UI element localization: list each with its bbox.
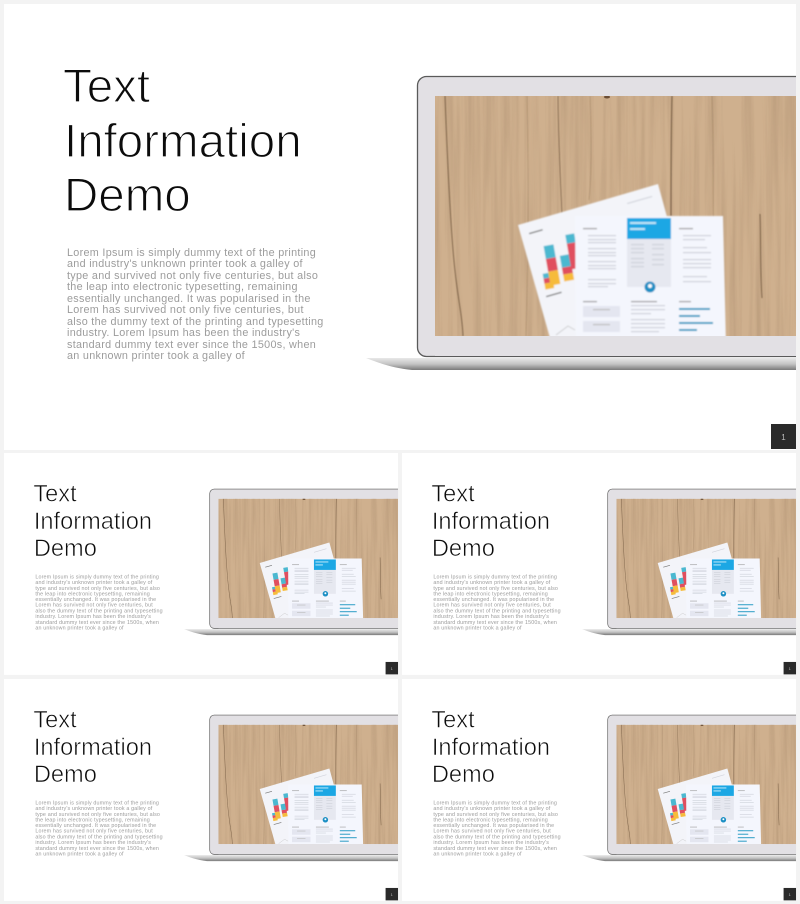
page number badge: 1 xyxy=(789,666,792,671)
body text xyxy=(35,574,163,632)
slide 2: small panel top left xyxy=(4,453,409,675)
title: Information xyxy=(64,115,302,168)
body text: Lorem has survived not only five centuries, but xyxy=(67,304,304,316)
body text: industry. Lorem Ipsum has been the industry's xyxy=(433,840,549,846)
body text: industry. Lorem Ipsum has been the industry's xyxy=(35,614,151,620)
title xyxy=(63,60,302,222)
body text: the leap into electronic typesetting, remaining xyxy=(35,817,150,823)
title: Text xyxy=(33,482,77,508)
body text: Lorem Ipsum is simply dummy text of the printing xyxy=(433,800,557,806)
body text: and industry's unknown printer took a galley of xyxy=(433,580,551,586)
body text: the leap into electronic typesetting, remaining xyxy=(433,591,548,597)
body text: also the dummy text of the printing and typesetting xyxy=(433,609,561,615)
body text: and industry's unknown printer took a galley of xyxy=(35,580,153,586)
body text: Lorem has survived not only five centuries, but xyxy=(433,829,551,835)
page number badge xyxy=(771,424,796,449)
title: Demo xyxy=(34,536,97,562)
body text: Lorem has survived not only five centuries, but xyxy=(35,829,153,835)
body text: an unknown printer took a galley of xyxy=(35,626,124,632)
body text: also the dummy text of the printing and typesetting xyxy=(67,316,324,328)
body text: industry. Lorem Ipsum has been the industry's xyxy=(67,327,301,339)
body text: also the dummy text of the printing and typesetting xyxy=(35,835,163,841)
title: Information xyxy=(34,735,152,761)
laptop with wood photo and documents xyxy=(582,715,800,861)
title: Information xyxy=(34,509,152,535)
title: Information xyxy=(432,735,550,761)
body text: Lorem Ipsum is simply dummy text of the printing xyxy=(67,247,316,259)
body text: essentially unchanged. It was popularised in the xyxy=(35,597,156,603)
body text: and industry's unknown printer took a galley of xyxy=(35,806,153,812)
body text: the leap into electronic typesetting, remaining xyxy=(433,817,548,823)
body text: type and survived not only five centuries, but also xyxy=(35,812,160,818)
body text: essentially unchanged. It was popularised in the xyxy=(35,823,156,829)
title xyxy=(33,482,152,562)
slide 5: small panel bottom right xyxy=(402,679,800,901)
body text: standard dummy text ever since the 1500s, when xyxy=(35,846,159,852)
body text: type and survived not only five centuries, but also xyxy=(35,586,160,592)
body text: also the dummy text of the printing and typesetting xyxy=(433,835,561,841)
title xyxy=(33,708,152,788)
body text: the leap into electronic typesetting, remaining xyxy=(67,281,298,293)
page number badge xyxy=(386,888,398,900)
page number badge: 1 xyxy=(391,666,394,671)
title xyxy=(431,482,550,562)
body text: Lorem Ipsum is simply dummy text of the printing xyxy=(35,800,159,806)
body text: standard dummy text ever since the 1500s, when xyxy=(67,339,316,351)
body text: an unknown printer took a galley of xyxy=(433,626,522,632)
page number badge xyxy=(386,662,398,674)
body text: industry. Lorem Ipsum has been the industry's xyxy=(35,840,151,846)
title: Demo xyxy=(34,762,97,788)
laptop with wood photo and documents xyxy=(184,489,409,635)
body text xyxy=(433,800,561,858)
page number badge xyxy=(784,662,796,674)
body text: Lorem has survived not only five centuries, but xyxy=(35,603,153,609)
body text: the leap into electronic typesetting, remaining xyxy=(35,591,150,597)
slide 4: small panel bottom left xyxy=(4,679,409,901)
body text: Lorem Ipsum is simply dummy text of the printing xyxy=(35,574,159,580)
laptop with wood photo and documents xyxy=(184,715,409,861)
body text: and industry's unknown printer took a galley of xyxy=(67,258,304,270)
body text: type and survived not only five centuries, but also xyxy=(67,270,318,282)
title: Text xyxy=(33,708,77,734)
title: Demo xyxy=(64,169,191,222)
title: Text xyxy=(63,60,150,113)
body text: industry. Lorem Ipsum has been the industry's xyxy=(433,614,549,620)
title: Information xyxy=(432,509,550,535)
body text xyxy=(35,800,163,858)
body text: type and survived not only five centuries, but also xyxy=(433,812,558,818)
title: Demo xyxy=(432,536,495,562)
body text: also the dummy text of the printing and typesetting xyxy=(35,609,163,615)
body text: essentially unchanged. It was popularised in the xyxy=(433,597,554,603)
title: Text xyxy=(431,482,475,508)
slide 3: small panel top right xyxy=(402,453,800,675)
title: Text xyxy=(431,708,475,734)
body text: standard dummy text ever since the 1500s, when xyxy=(433,620,557,626)
body text: standard dummy text ever since the 1500s, when xyxy=(35,620,159,626)
laptop with wood photo and documents xyxy=(582,489,800,635)
page number badge: 1 xyxy=(781,433,786,442)
body text: Lorem has survived not only five centuries, but xyxy=(433,603,551,609)
title: Demo xyxy=(432,762,495,788)
body text: essentially unchanged. It was popularised in the xyxy=(67,293,311,305)
body text: and industry's unknown printer took a galley of xyxy=(433,806,551,812)
body text: standard dummy text ever since the 1500s, when xyxy=(433,846,557,852)
body text xyxy=(67,247,324,362)
body text: Lorem Ipsum is simply dummy text of the printing xyxy=(433,574,557,580)
page number badge: 1 xyxy=(391,892,394,897)
body text: an unknown printer took a galley of xyxy=(67,350,246,362)
laptop with wood photo and documents xyxy=(366,76,800,370)
body text: an unknown printer took a galley of xyxy=(433,852,522,858)
body text: type and survived not only five centuries, but also xyxy=(433,586,558,592)
body text: essentially unchanged. It was popularised in the xyxy=(433,823,554,829)
page number badge xyxy=(784,888,796,900)
slide 1: large panel xyxy=(4,4,800,450)
title xyxy=(431,708,550,788)
page number badge: 1 xyxy=(789,892,792,897)
body text xyxy=(433,574,561,632)
body text: an unknown printer took a galley of xyxy=(35,852,124,858)
